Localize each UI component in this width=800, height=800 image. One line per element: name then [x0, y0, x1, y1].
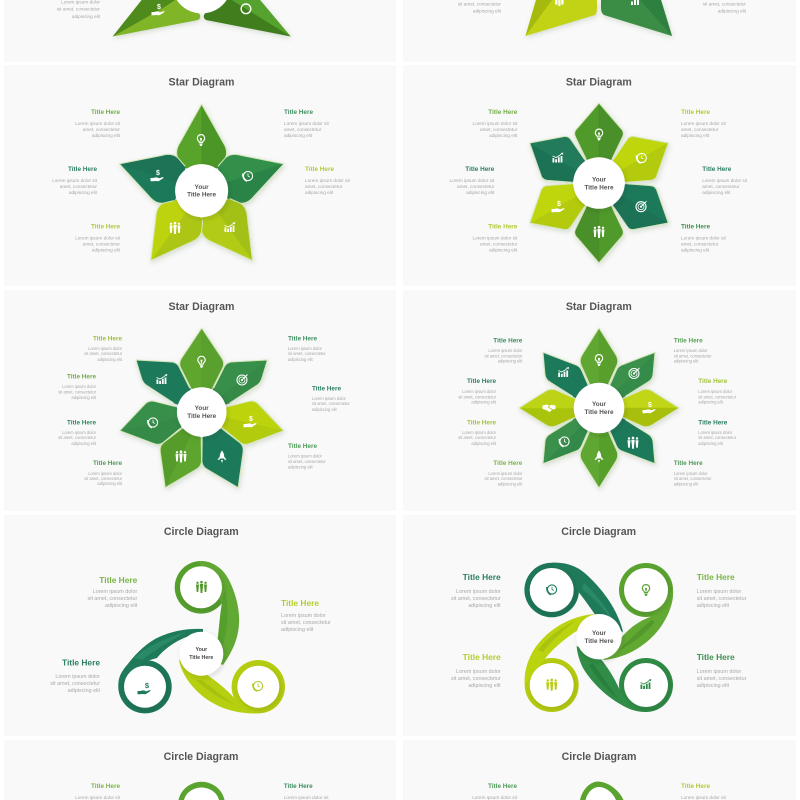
chart: teal swirl: [524, 563, 623, 632]
center circle: [179, 632, 223, 676]
label: bottom right: Lorem ipsum dolor: [697, 669, 742, 675]
icon: dollar hand: $: [557, 201, 561, 208]
label: bottom left: [451, 652, 501, 689]
label: right 2: sit amet, consectetur: [312, 401, 350, 406]
label: middle right: amet, consectetur: [305, 184, 343, 189]
icon: people: [546, 679, 557, 691]
label: bottom left: [472, 224, 518, 252]
label: right 1: Title Here: [288, 336, 317, 342]
chart: eight petal star: [519, 328, 679, 488]
label: bottom left: adipiscing elit: [92, 247, 121, 252]
label: middle left: Lorem ipsum dolor sit: [52, 178, 98, 183]
label: right 2: Lorem ipsum dolor: [698, 389, 733, 394]
label: top left: Lorem ipsum dolor sit: [75, 121, 121, 126]
label: bottom left: Lorem ipsum dolor sit: [75, 236, 121, 241]
label: left 2: Lorem ipsum dolor: [62, 384, 97, 389]
label: top right: adipiscing elit: [697, 603, 730, 609]
label: top right: [681, 109, 727, 138]
icon: dollar hand: [244, 416, 256, 427]
label: left 2: Title Here: [67, 374, 96, 380]
label: bottom left: amet, consectetur: [83, 241, 120, 246]
label: right 1: Lorem ipsum dolor: [288, 346, 323, 351]
label: left 1: Lorem ipsum dolor: [488, 348, 523, 353]
panel: six point star diagram: [403, 65, 796, 286]
label: bottom left: Title Here: [62, 657, 100, 667]
label: top left: sit amet, consectetur: [88, 596, 137, 602]
panel: cropped star diagram, top left: [4, 0, 396, 62]
center circle: Title Here: [187, 192, 217, 198]
icon: dollar hand: $: [648, 402, 652, 409]
icon: dollar hand: $: [156, 170, 160, 177]
icon: people: [555, 0, 564, 6]
center circle: [573, 157, 625, 209]
label: right 2: Title Here: [698, 378, 728, 385]
label: top left text: sit amet, consectetur: [57, 7, 100, 12]
label: left 3: sit amet, consectetur: [58, 435, 97, 440]
label: middle left: amet, consectetur: [457, 184, 495, 189]
label: right 2: sit amet, consectetur: [698, 394, 737, 399]
panel: seven point star diagram: [4, 290, 396, 511]
icon: target: [636, 201, 646, 212]
label: middle right: [305, 166, 351, 195]
chart: six petal star: [518, 103, 680, 263]
heading: Circle Diagram: [562, 751, 636, 763]
label: right: sit amet, consectetur: [281, 620, 331, 626]
label: top right: [284, 109, 330, 138]
label: top left: [472, 109, 518, 138]
label: left: [472, 783, 518, 800]
panel: eight point star diagram: [403, 290, 796, 511]
label: bottom left: [75, 224, 121, 252]
label: right: Lorem ipsum dolor: [281, 613, 326, 619]
heading: Circle Diagram: [561, 526, 636, 538]
label: bottom left: Title Here: [463, 652, 501, 662]
label: top right: adipiscing elit: [681, 133, 710, 138]
label: left 4: [84, 460, 123, 486]
icon: dollar hand: $: [249, 416, 253, 423]
label: right: [681, 783, 727, 800]
label: right 1: sit amet, consectetur: [674, 353, 712, 358]
icon: phone clock: [547, 585, 557, 595]
label: left 2: adipiscing elit: [71, 395, 97, 400]
label: left 3: [458, 420, 497, 446]
label: right: adipiscing elit: [281, 627, 314, 633]
label: right 2: adipiscing elit: [312, 407, 337, 412]
label: right 4: adipiscing elit: [674, 481, 699, 486]
icon: chart: [631, 0, 639, 5]
label: middle left: Lorem ipsum dolor sit: [449, 178, 495, 183]
label: top left: Lorem ipsum dolor: [456, 589, 501, 595]
label: bottom left: Title Here: [488, 224, 518, 230]
label: left 1: adipiscing elit: [97, 357, 123, 362]
icon: people: [170, 222, 180, 234]
icon: target: [237, 374, 248, 385]
label: left: [75, 783, 121, 800]
label: top left: adipiscing elit: [105, 603, 138, 609]
icon: dollar hand: [150, 170, 164, 181]
label: left 1: Title Here: [93, 336, 122, 342]
chart: green swirl: [603, 563, 673, 660]
label: right 1: [288, 336, 326, 362]
label: bottom left: [50, 657, 100, 694]
center circle: Title Here: [189, 655, 213, 661]
label: right 3: adipiscing elit: [288, 464, 313, 470]
label: bottom left: Title Here: [91, 224, 120, 230]
label: top left: Title Here: [488, 109, 518, 116]
icon: chart: [640, 679, 651, 689]
label: bottom right: [681, 224, 727, 252]
label: right 1: Title Here: [674, 338, 703, 344]
label: left 3: adipiscing elit: [471, 441, 497, 446]
label: top right: Lorem ipsum dolor sit: [681, 121, 727, 126]
label: top right text: sit amet, consectetur: [458, 2, 501, 7]
icon: people: [594, 226, 604, 238]
center circle: [576, 614, 622, 659]
panel: five point star diagram: [4, 65, 396, 286]
label: right 2: adipiscing elit: [698, 400, 724, 405]
label: top right: Title Here: [284, 109, 313, 116]
label: left 4: sit amet, consectetur: [485, 476, 523, 481]
label: right 3: Lorem ipsum dolor: [698, 430, 733, 435]
chart: green swirl: [175, 561, 239, 665]
label: top left: [451, 572, 501, 609]
center circle: Your: [592, 630, 607, 637]
label: left 4: adipiscing elit: [498, 481, 523, 486]
label: right 3: [698, 420, 737, 446]
heading: Circle Diagram: [164, 751, 238, 763]
label: top left: sit amet, consectetur: [451, 596, 501, 602]
label: right: Lorem ipsum dolor sit: [284, 795, 329, 800]
label: bottom left: adipiscing elit: [489, 247, 518, 252]
label: right 1: sit amet, consectetur: [288, 351, 326, 356]
label: bottom right: amet, consectetur: [681, 241, 719, 246]
label: bottom right: adipiscing elit: [697, 683, 730, 689]
center circle: Title Here: [584, 409, 614, 416]
chart: cropped star petals: [526, 0, 672, 36]
label: top left: Lorem ipsum dolor: [93, 589, 137, 595]
label: far right text: adipiscing elit: [718, 9, 747, 14]
icon: dollar hand: $: [157, 4, 161, 11]
chart: dark green swirl: [577, 646, 673, 712]
label: middle right: Lorem ipsum dolor sit: [702, 178, 748, 183]
label: right 3: Lorem ipsum dolor: [288, 454, 323, 458]
label: left 2: [458, 378, 497, 405]
center circle: [175, 164, 228, 217]
label: right 2: Title Here: [312, 386, 341, 392]
label: middle right: adipiscing elit: [305, 190, 334, 195]
icon: chart: [224, 222, 235, 232]
icon: rocket: [218, 450, 226, 463]
icon: dollar hand: [552, 201, 564, 212]
label: middle right: Title Here: [305, 166, 334, 173]
label: far right text: sit amet, consectetur: [703, 2, 746, 7]
label: right 1: [674, 338, 712, 364]
chart: seven petal star: [115, 328, 288, 497]
label: right 1: adipiscing elit: [288, 357, 313, 362]
label: left 4: Title Here: [493, 460, 523, 467]
label: top left: adipiscing elit: [489, 133, 518, 138]
label: right: Title Here: [284, 783, 313, 790]
label: left 1: Title Here: [493, 338, 523, 344]
label: bottom right: sit amet, consectetur: [697, 676, 747, 682]
icon: bulb: [595, 354, 603, 366]
label: right: Lorem ipsum dolor sit: [681, 795, 727, 800]
label: left 1: [84, 336, 123, 362]
label: left: Lorem ipsum dolor sit: [472, 795, 518, 800]
label: right 4: Title Here: [674, 460, 703, 467]
label: top left: amet, consectetur: [480, 127, 518, 132]
label: bottom right: [697, 652, 747, 689]
icon: bulb: [197, 356, 206, 368]
label: bottom right: Title Here: [681, 224, 710, 230]
heading: Star Diagram: [169, 76, 234, 88]
icon: phone clock: [243, 171, 253, 181]
chart: lime swirl: [179, 660, 285, 713]
label: top left text: adipiscing elit: [72, 14, 101, 19]
icon: dollar hand: [642, 402, 656, 413]
label: top left: adipiscing elit: [92, 133, 121, 138]
label: right: [284, 783, 329, 800]
center circle: Title Here: [187, 413, 217, 420]
label: left 1: [485, 338, 523, 364]
label: top right: Title Here: [697, 572, 735, 582]
label: right 4: [674, 460, 712, 486]
center circle: Your: [592, 176, 607, 184]
label: left 3: Title Here: [467, 420, 496, 426]
label: top left: amet, consectetur: [83, 127, 120, 132]
label: middle left: Title Here: [68, 166, 97, 173]
icon: people: [196, 581, 207, 593]
label: left 3: Lorem ipsum dolor: [462, 430, 497, 435]
icon: phone clock: [559, 437, 569, 447]
label: middle left: adipiscing elit: [69, 190, 98, 195]
icon: rocket: [594, 450, 604, 463]
label: bottom left: adipiscing elit: [68, 688, 100, 694]
ring: cropped green ring: [178, 782, 224, 800]
panel: three part circle diagram: [4, 515, 396, 736]
label: middle left: Title Here: [465, 166, 495, 173]
label: bottom left: Lorem ipsum dolor sit: [472, 236, 518, 241]
label: bottom left: sit amet, consectetur: [50, 681, 100, 687]
label: left 4: Lorem ipsum dolor: [88, 471, 123, 476]
label: right: Title Here: [681, 783, 710, 790]
label: top left: Title Here: [463, 572, 501, 582]
label: middle right: [702, 166, 748, 195]
icon: bulb: [197, 134, 205, 146]
label: right 4: Lorem ipsum dolor: [674, 471, 708, 476]
label: bottom left: adipiscing elit: [468, 683, 501, 689]
label: left 1: Lorem ipsum dolor: [88, 346, 123, 351]
label: left 1: adipiscing elit: [498, 359, 523, 364]
label: top right: amet, consectetur: [681, 127, 719, 132]
panel: cropped circle diagram, bottom left: [4, 740, 396, 800]
label: bottom right: Title Here: [697, 652, 735, 662]
label: right: [281, 598, 331, 633]
label: right 3: sit amet, consectetur: [698, 435, 737, 440]
icon: phone clock: [637, 153, 646, 163]
label: left 2: adipiscing elit: [471, 400, 497, 405]
center circle: [177, 387, 226, 437]
label: top right: adipiscing elit: [284, 133, 313, 138]
panel: cropped star diagram, top right: [403, 0, 796, 62]
label: right: Title Here: [281, 598, 319, 608]
label: left: Title Here: [488, 783, 517, 790]
label: top left: adipiscing elit: [468, 603, 501, 609]
icon: dollar hand: $: [145, 681, 150, 690]
label: left 3: Lorem ipsum dolor: [62, 430, 97, 435]
label: top left: [88, 575, 138, 609]
label: middle right: Lorem ipsum dolor sit: [305, 178, 351, 183]
label: right 3: Title Here: [288, 443, 317, 450]
center circle: Your: [592, 401, 607, 408]
label: top left: Title Here: [99, 575, 138, 585]
label: bottom right: adipiscing elit: [681, 247, 710, 252]
ring: cropped green ring: [580, 782, 624, 800]
label: middle right: adipiscing elit: [702, 190, 731, 195]
heading: Star Diagram: [566, 76, 632, 88]
icon: phone: [253, 681, 263, 691]
label: left 4: adipiscing elit: [97, 481, 123, 486]
label: top left: [75, 109, 121, 138]
label: left 3: [58, 420, 97, 446]
label: bottom left: sit amet, consectetur: [451, 676, 501, 682]
center circle: [574, 383, 624, 433]
label: top right text: adipiscing elit: [473, 9, 502, 14]
label: left 3: adipiscing elit: [71, 441, 97, 446]
icon: chart: [558, 367, 569, 377]
label: bottom left: Lorem ipsum dolor: [55, 674, 100, 680]
label: left: Title Here: [91, 783, 120, 790]
chart: five petal star: [112, 104, 292, 275]
center circle: Your: [195, 184, 209, 191]
icon: dollar hand: [152, 4, 164, 15]
label: bottom left: amet, consectetur: [480, 241, 518, 246]
label: left 2: Lorem ipsum dolor: [462, 389, 497, 394]
panel: four part circle diagram: [403, 515, 796, 736]
label: left 2: sit amet, consectetur: [458, 394, 497, 399]
label: right 1: Lorem ipsum dolor: [674, 348, 708, 353]
label: top right: [697, 572, 747, 609]
center circle: Title Here: [584, 638, 614, 645]
icon: bulb: [642, 584, 650, 596]
label: left 4: [485, 460, 523, 486]
center circle: Your: [195, 647, 207, 653]
label: right 1: adipiscing elit: [674, 359, 699, 364]
label: right 3: adipiscing elit: [698, 441, 724, 446]
icon: chart: [156, 374, 167, 384]
label: top right: Lorem ipsum dolor sit: [284, 121, 330, 126]
label: middle left: [52, 166, 98, 195]
label: middle left: amet, consectetur: [60, 184, 97, 189]
center circle: Your: [195, 405, 209, 412]
label: top right: amet, consectetur: [284, 127, 322, 132]
label: left 2: Title Here: [467, 378, 496, 385]
label: right 4: sit amet, consectetur: [674, 476, 712, 481]
label: left 3: Title Here: [67, 420, 96, 426]
center circle: cropped: [177, 0, 227, 13]
label: left 4: Lorem ipsum dolor: [488, 471, 523, 476]
label: middle right: amet, consectetur: [702, 184, 740, 189]
center circle: Title Here: [584, 184, 614, 192]
label: left 4: Title Here: [93, 460, 122, 467]
label: right 3: sit amet, consectetur: [288, 459, 326, 464]
icon: phone clock: [241, 4, 251, 14]
icon: chart: [552, 152, 563, 162]
label: left 3: sit amet, consectetur: [458, 435, 497, 440]
label: middle left: [449, 166, 495, 195]
label: top right: Title Here: [681, 109, 710, 116]
label: right 2: [698, 378, 737, 405]
icon: people: [628, 437, 638, 449]
heading: Circle Diagram: [164, 526, 239, 538]
label: right 3: Title Here: [698, 420, 728, 426]
label: middle right: Title Here: [702, 166, 732, 173]
panel: cropped circle diagram, bottom right: [403, 740, 796, 800]
label: left 2: sit amet, consectetur: [58, 390, 97, 394]
label: bottom left: Lorem ipsum dolor: [456, 669, 501, 675]
label: top left: Title Here: [91, 109, 120, 116]
label: left 2: [58, 374, 97, 400]
icon: target: [629, 368, 640, 378]
label: middle left: adipiscing elit: [466, 190, 495, 195]
label: left: Lorem ipsum dolor sit: [75, 795, 121, 800]
icon: people: [176, 450, 186, 462]
icon: phone clock: [148, 418, 158, 428]
icon: bulb: [595, 128, 603, 140]
chart: teal swirl: [118, 629, 203, 713]
label: top right: Lorem ipsum dolor: [697, 589, 742, 595]
label: top right: sit amet, consectetur: [697, 596, 747, 602]
chart: lime swirl: [525, 614, 595, 712]
label: right 2: [312, 386, 350, 412]
label: right 2: Lorem ipsum dolor: [312, 396, 347, 401]
label: bottom right: Lorem ipsum dolor sit: [681, 236, 727, 241]
label: left 1: sit amet, consectetur: [84, 351, 123, 356]
label: right 3: [288, 443, 326, 470]
heading: Star Diagram: [169, 301, 234, 313]
label: left 1: sit amet, consectetur: [485, 353, 523, 358]
heading: Star Diagram: [566, 301, 632, 313]
chart: cropped star petals: [113, 0, 291, 36]
label: top left: Lorem ipsum dolor sit: [472, 121, 518, 126]
label: left 4: sit amet, consectetur: [84, 476, 123, 481]
icon: handshake: [542, 404, 556, 412]
